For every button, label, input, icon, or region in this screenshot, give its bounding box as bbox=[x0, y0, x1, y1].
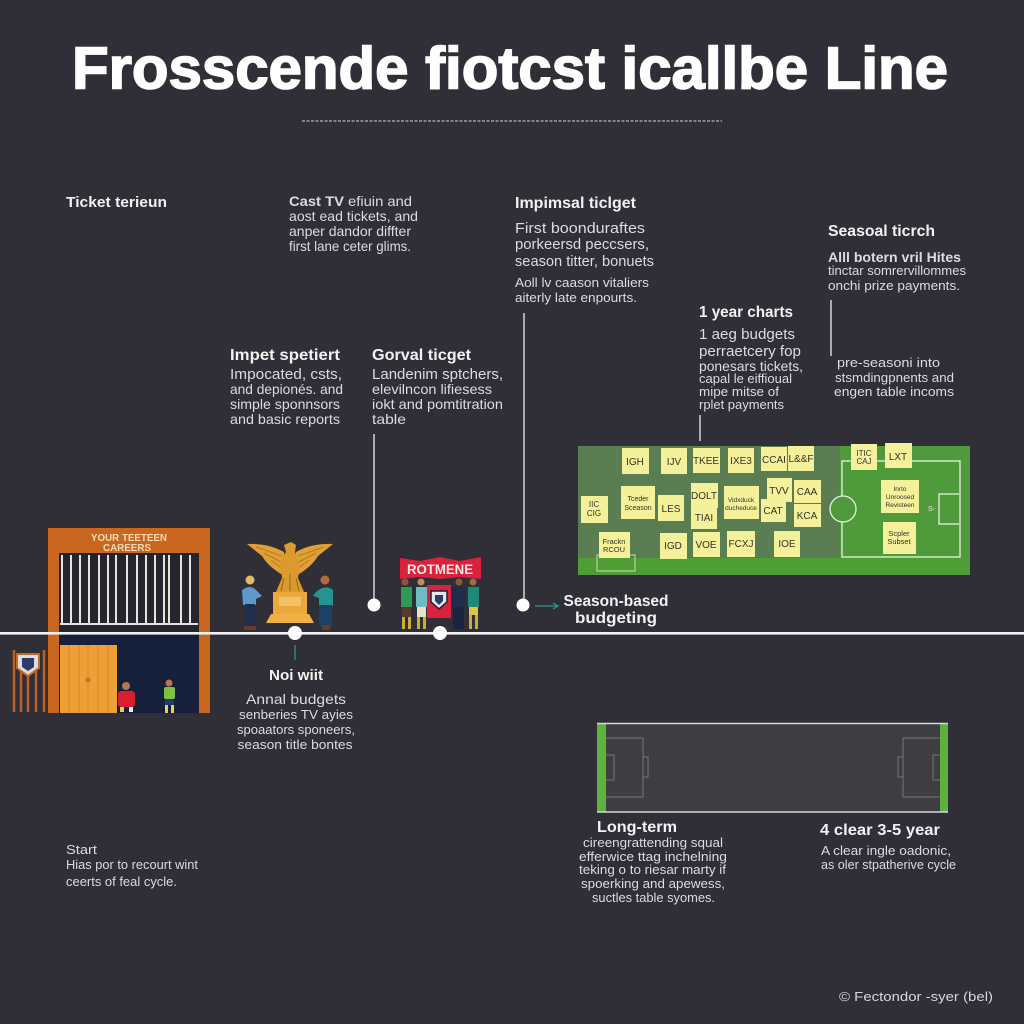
sticky notes: CAT bbox=[763, 506, 783, 517]
red banner: ROTMENE bbox=[407, 561, 473, 577]
sticky notes: DOLT bbox=[691, 491, 717, 502]
connector: Gorval ticget bbox=[368, 434, 380, 612]
crest flag bbox=[427, 585, 451, 618]
callout: Season-based budgeting bbox=[535, 593, 668, 627]
text block: Impinsal ticget: Impimsal ticlget bbox=[515, 195, 637, 212]
text block: 1 year charts: capal le eiffioual bbox=[699, 371, 792, 386]
sticky notes: TVV bbox=[769, 486, 789, 497]
text block: Seasoal ticrch bbox=[828, 223, 966, 399]
text block: Long-term: suctles table syomes. bbox=[592, 890, 715, 905]
text block: Impinsal ticget: First boonduraftes bbox=[515, 220, 645, 237]
text block: Long-term: spoerking and apewess, bbox=[581, 876, 725, 891]
text block: Gorval ticget: Landenim sptchers, bbox=[372, 366, 503, 383]
text block: Gorval ticget bbox=[372, 347, 503, 427]
text block: Start: ceerts of feal cycle. bbox=[66, 874, 177, 889]
sticky notes: Scpler bbox=[888, 529, 910, 538]
sticky notes: CAA bbox=[797, 487, 818, 498]
sticky notes: Subset bbox=[887, 537, 912, 546]
sticky notes: L&&F bbox=[788, 454, 814, 465]
title: Frosscende fiotcst icallbe Line bbox=[72, 36, 948, 102]
sticky notes: LES bbox=[662, 504, 681, 515]
text block: Impinsal ticget: porkeersd peccsers, bbox=[515, 236, 649, 253]
connector: Impinsal ticget bbox=[516, 313, 530, 612]
text block: Noi wiit bbox=[237, 667, 355, 752]
club crest fence bbox=[14, 650, 44, 712]
timeline axis bbox=[0, 626, 1024, 660]
text block: Gorval ticget: iokt and pomtitration bbox=[372, 396, 503, 412]
milestone marker 1 bbox=[288, 626, 302, 640]
text block: Ticket terieun: Ticket terieun bbox=[66, 194, 167, 211]
text block: Long-term: teking o to riesar marty if bbox=[579, 862, 726, 877]
text block: Noi wiit: spoaators sponeers, bbox=[237, 722, 355, 737]
text block: Cast TV: anper dandor diffter bbox=[289, 223, 411, 239]
sticky notes: IGH bbox=[626, 457, 644, 468]
fan figures bbox=[401, 578, 479, 629]
callout: Season-based budgeting: budgeting bbox=[575, 610, 657, 627]
text block: Impet spetiert: simple sponnsors bbox=[230, 396, 340, 412]
gate sign text: CAREERS bbox=[103, 543, 151, 554]
sticky notes: IOE bbox=[778, 539, 796, 550]
sticky notes: KCA bbox=[797, 511, 818, 522]
sticky notes: TKEE bbox=[693, 456, 719, 467]
gate sign text: YOUR TEETEEN bbox=[91, 533, 167, 544]
text block: Gorval ticget: table bbox=[372, 411, 406, 427]
sticky notes: CIG bbox=[587, 509, 601, 518]
text block: Cast TV bbox=[289, 193, 418, 254]
text block: Noi wiit: season title bontes bbox=[238, 737, 353, 752]
gate door bbox=[60, 645, 117, 713]
text block: 4 clear 3-5 year bbox=[820, 822, 956, 872]
text block: Gorval ticget: Gorval ticget bbox=[372, 347, 472, 364]
text block: Cast TV: aost ead tickets, and bbox=[289, 208, 418, 224]
text block: Noi wiit: Noi wiit bbox=[269, 667, 323, 684]
connector: Seasoal ticrch bbox=[830, 300, 832, 356]
text block: Impinsal ticget: aiterly late enpourts. bbox=[515, 290, 637, 305]
text block: Seasoal ticrch: Alll botern vril Hites bbox=[828, 249, 961, 265]
text block: Impet spetiert bbox=[230, 347, 343, 427]
text block: Start: Start bbox=[66, 842, 97, 857]
text block: Impet spetiert: and basic reports bbox=[230, 411, 340, 427]
text block: Start bbox=[66, 842, 198, 889]
connector: 1 year charts bbox=[699, 415, 701, 441]
text block: 1 year charts: rplet payments bbox=[699, 397, 784, 412]
text block: Impinsal ticget: Aoll lv caason vitaliers bbox=[515, 275, 650, 290]
text block: 1 year charts: 1 aeg budgets bbox=[699, 326, 795, 343]
sticky notes: ITIC bbox=[856, 449, 872, 458]
sticky notes: IXE3 bbox=[730, 456, 752, 467]
footer credit: © Fectondor -syer (bel) bbox=[839, 989, 993, 1004]
text block: 1 year charts: perraetcery fop bbox=[699, 343, 801, 360]
text block: Long-term: efferwice ttag inchelning bbox=[579, 849, 727, 864]
sticky notes: RCOU bbox=[603, 545, 625, 554]
text block: Noi wiit: senberies TV ayies bbox=[239, 707, 354, 722]
text block: Impet spetiert: Impet spetiert bbox=[230, 347, 341, 364]
sticky notes: LXT bbox=[889, 452, 907, 463]
text block: 1 year charts bbox=[699, 304, 803, 412]
sticky notes: ducheduce bbox=[725, 505, 757, 512]
eagle trophy with figures bbox=[242, 542, 333, 630]
long grey pitch bbox=[597, 723, 948, 812]
sticky notes: Tceder bbox=[627, 496, 649, 503]
text block: Seasoal ticrch: onchi prize payments. bbox=[828, 278, 960, 293]
sticky notes: Unroosed bbox=[886, 494, 914, 501]
text block: Long-term: cireengrattending squal bbox=[583, 835, 723, 850]
callout: Season-based budgeting: Season-based bbox=[564, 593, 668, 610]
figure right bbox=[313, 576, 333, 630]
sticky notes: Inrto bbox=[893, 486, 907, 493]
gate sign text bbox=[91, 533, 167, 554]
text block: 1 year charts: ponesars tickets, bbox=[699, 358, 803, 374]
sticky notes: Revisteen bbox=[886, 502, 915, 509]
fans with banner bbox=[400, 557, 481, 629]
child in red bbox=[118, 682, 135, 712]
text block: 4 clear 3-5 year: 4 clear 3-5 year bbox=[820, 822, 940, 839]
sticky notes bbox=[581, 443, 919, 559]
text block: 1 year charts: mipe mitse of bbox=[699, 384, 779, 399]
sticky notes: IIC bbox=[589, 500, 599, 509]
sticky notes: IJV bbox=[667, 457, 682, 468]
text block: Gorval ticget: elevilncon lifiesess bbox=[372, 381, 492, 397]
text block: Impinsal ticget: season titter, bonuets bbox=[515, 253, 654, 270]
football pitch with sticky notes: S- bbox=[928, 506, 936, 513]
text block: Start: Hias por to recourt wint bbox=[66, 857, 198, 872]
text block: 4 clear 3-5 year: A clear ingle oadonic, bbox=[821, 843, 951, 858]
sticky notes: FCXJ bbox=[728, 539, 754, 550]
text block: Seasoal ticrch: pre-seasoni into bbox=[837, 355, 940, 370]
text block: Long-term: Long-term bbox=[597, 819, 677, 836]
milestone marker 2 bbox=[433, 626, 447, 640]
sticky notes: Sceason bbox=[624, 505, 652, 512]
text block: Impinsal ticget bbox=[515, 195, 654, 305]
text block: Seasoal ticrch: Seasoal ticrch bbox=[828, 223, 935, 240]
text block: Cast TV: first lane ceter glims. bbox=[289, 238, 411, 254]
golden eagle bbox=[247, 542, 333, 592]
sticky notes: TIAI bbox=[695, 513, 713, 524]
text block: Long-term bbox=[579, 819, 727, 905]
sticky notes: CCAI bbox=[762, 455, 786, 466]
sticky notes: Frackn bbox=[603, 537, 625, 546]
sticky notes: VOE bbox=[695, 540, 717, 551]
text block: Seasoal ticrch: engen table incoms bbox=[834, 384, 955, 399]
text block: Impet spetiert: Impocated, csts, bbox=[230, 366, 342, 383]
figure left bbox=[242, 576, 262, 630]
sticky notes: Vidxduck bbox=[728, 497, 755, 504]
sticky notes: IGD bbox=[664, 541, 682, 552]
text block: Impet spetiert: and depionés. and bbox=[230, 381, 343, 397]
text block: Seasoal ticrch: tinctar somrervillommes bbox=[828, 263, 966, 278]
text block: 4 clear 3-5 year: as oler stpatherive cycle bbox=[821, 857, 956, 872]
trophy plinth bbox=[266, 592, 314, 623]
stadium gate illustration bbox=[14, 528, 210, 713]
text block: Cast TV: Cast TV efiuin and bbox=[289, 193, 412, 209]
text block: Noi wiit: Annal budgets bbox=[246, 691, 346, 707]
child in green bbox=[164, 680, 175, 713]
text block: 1 year charts: 1 year charts bbox=[699, 304, 793, 321]
arrow bbox=[535, 603, 558, 609]
text block: Seasoal ticrch: stsmdingpnents and bbox=[835, 370, 954, 385]
sticky notes: CAJ bbox=[856, 457, 872, 466]
football pitch with sticky notes bbox=[578, 443, 970, 575]
